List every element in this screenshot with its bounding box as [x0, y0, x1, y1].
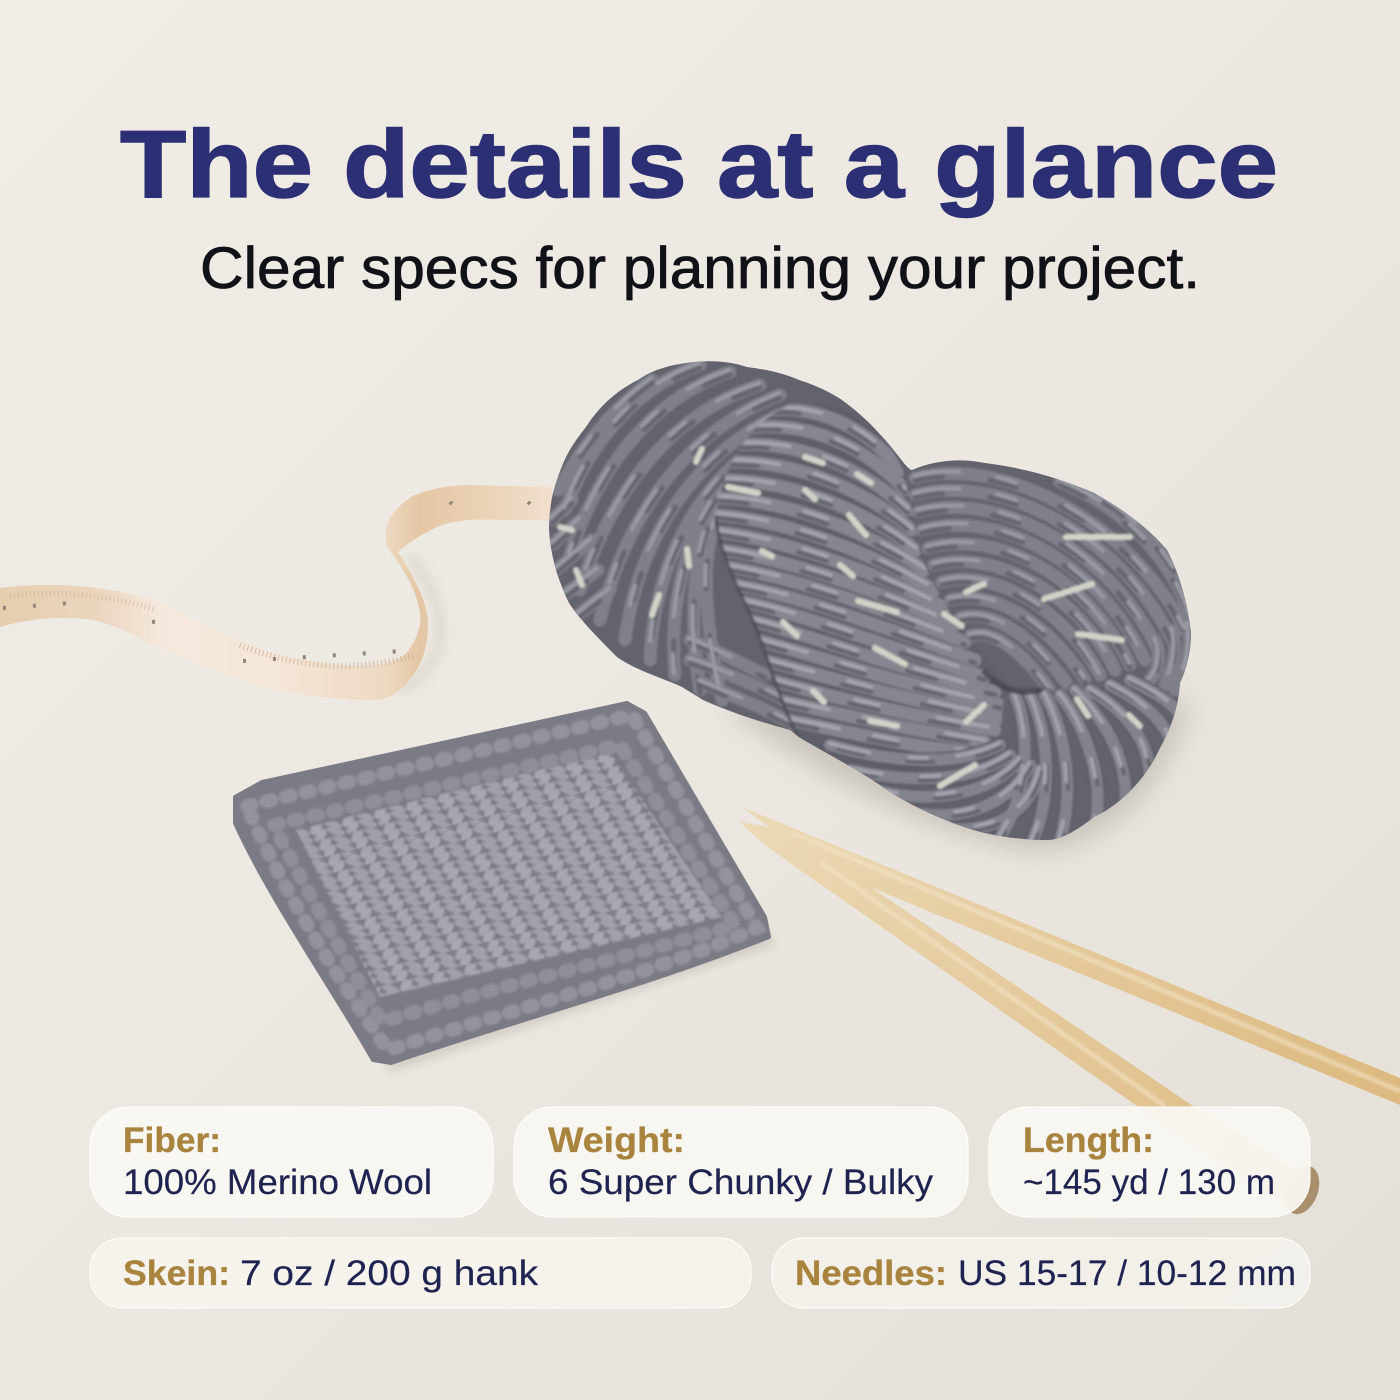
- shadow under swatch: [240, 715, 776, 1072]
- left and right lobes: [551, 363, 1195, 731]
- spec pill: fiber: Fiber:: [123, 1121, 221, 1160]
- spec pill: length: [989, 1107, 1310, 1217]
- light flecks: [560, 449, 1140, 786]
- spec pill: length: Length:: [1023, 1121, 1154, 1160]
- spec pill: needles: Needles:: [795, 1254, 947, 1293]
- subtitle: Clear specs for planning your project.: [200, 236, 1200, 301]
- spec pill: fiber: [90, 1107, 493, 1217]
- twist knot shadow: [985, 672, 1040, 692]
- title: The details at a glance: [120, 111, 1278, 218]
- lower fan of strands: [829, 678, 1181, 844]
- spec pill: weight: [514, 1107, 968, 1217]
- spec pill: needles: [772, 1238, 1310, 1308]
- spec pill: weight: 6 Super Chunky / Bulky: [548, 1163, 934, 1202]
- spec pill: weight: Weight:: [548, 1121, 685, 1160]
- shadow under yarn: [720, 700, 1190, 852]
- knitting needles: [740, 807, 1400, 1219]
- stockinette panel: [296, 752, 722, 997]
- spec pill: fiber: 100% Merino Wool: [123, 1163, 432, 1202]
- spec pill: length: ~145 yd / 130 m: [1023, 1163, 1275, 1202]
- braided border rows: [247, 715, 757, 1050]
- spec pill: skein: 7 oz / 200 g hank: [240, 1254, 539, 1293]
- central twisted band: [716, 403, 1004, 764]
- spec pill: needles: US 15-17 / 10-12 mm: [958, 1254, 1296, 1293]
- spec pill: skein: [90, 1238, 751, 1308]
- knit swatch: [235, 703, 769, 1063]
- measuring tape: [0, 485, 552, 700]
- spec pill: skein: Skein:: [123, 1254, 230, 1293]
- yarn hank: [549, 361, 1195, 844]
